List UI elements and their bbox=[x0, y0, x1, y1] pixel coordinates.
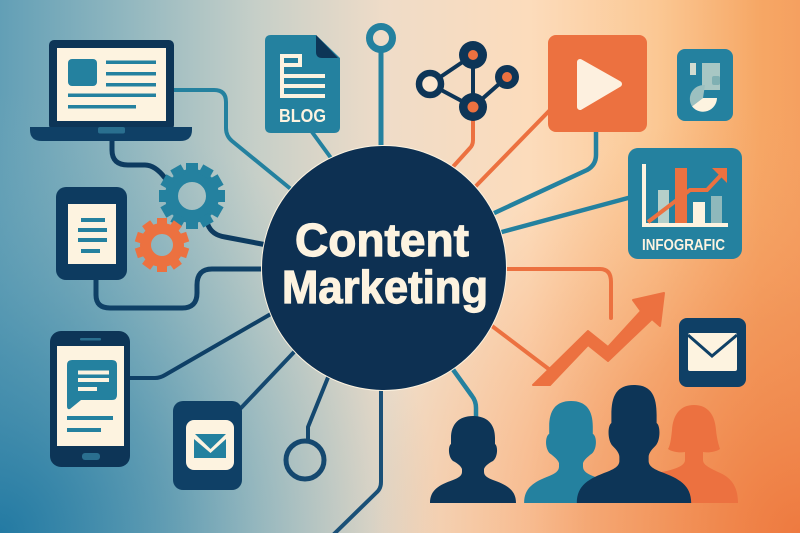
title: Marketing bbox=[282, 261, 488, 313]
audience: person orange bbox=[650, 405, 738, 503]
icon: email envelope bbox=[679, 318, 746, 387]
icon: smartphone with chat bubble bbox=[50, 331, 130, 467]
icon: chart card bbox=[677, 49, 733, 121]
icon: growth arrow bbox=[533, 293, 664, 385]
audience: person navy bbox=[430, 416, 516, 503]
connector lines bbox=[96, 50, 628, 533]
icon: teal gear bbox=[159, 163, 225, 229]
infographic label: INFOGRAFIC bbox=[642, 237, 725, 254]
title: Content bbox=[295, 214, 469, 266]
icon: laptop bbox=[30, 40, 192, 141]
blog label: BLOG bbox=[279, 106, 326, 126]
audience: person navy large bbox=[577, 385, 691, 503]
icon: email tablet bbox=[173, 401, 242, 490]
audience: person teal bbox=[524, 401, 618, 503]
icon: orange gear bbox=[135, 218, 189, 272]
central hub bbox=[262, 146, 506, 390]
icon: tablet bbox=[56, 187, 127, 280]
icon: ring node bottom bbox=[286, 441, 324, 479]
panel: infographic card bbox=[628, 148, 742, 259]
icon: network nodes bbox=[419, 41, 519, 121]
icon: ring node top bbox=[370, 26, 392, 50]
icon: video play button bbox=[548, 35, 647, 132]
icon: blog document bbox=[265, 35, 340, 133]
